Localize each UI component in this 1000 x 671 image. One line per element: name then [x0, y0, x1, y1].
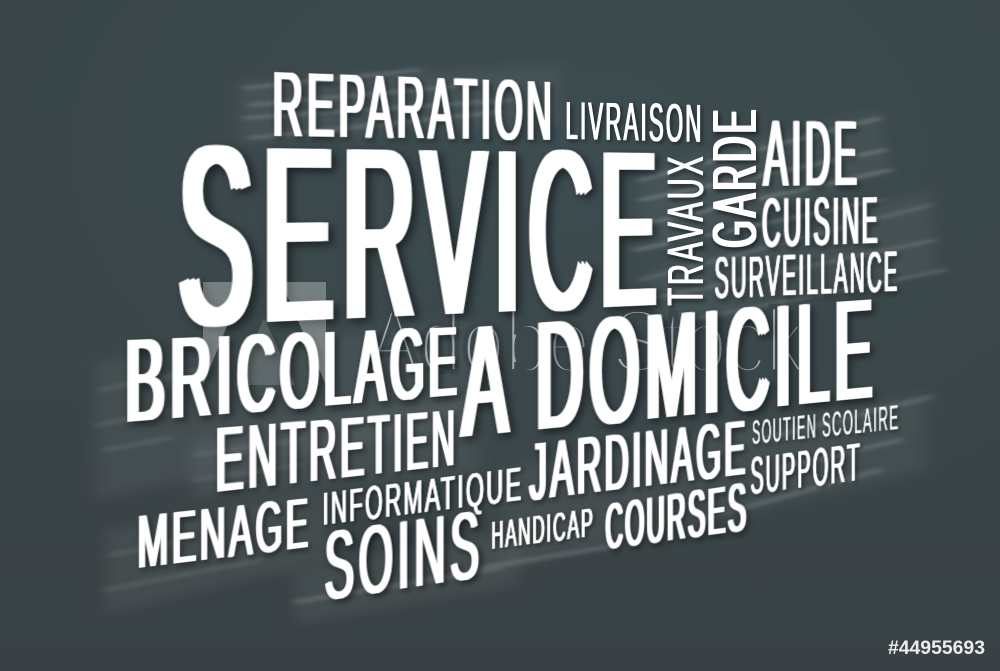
word: GARDE: GARDE — [700, 106, 770, 247]
text: HANDICAP — [492, 481, 573, 558]
text: ENTRETIEN — [216, 409, 535, 562]
text: INFORMATIQUE — [323, 442, 508, 535]
stock id: #44955693 — [888, 637, 985, 659]
text: MENAGE — [138, 500, 331, 597]
text: LIVRAISON — [566, 91, 704, 154]
word: TRAVAUX: TRAVAUX — [657, 153, 714, 305]
word: BRICOLAGE: BRICOLAGE — [126, 315, 558, 503]
text: SOINS — [325, 499, 491, 621]
text: REPARATION — [273, 52, 614, 175]
watermark text: Adobe Stock: Adobe Stock — [368, 292, 805, 392]
text: COURSES — [606, 439, 701, 564]
